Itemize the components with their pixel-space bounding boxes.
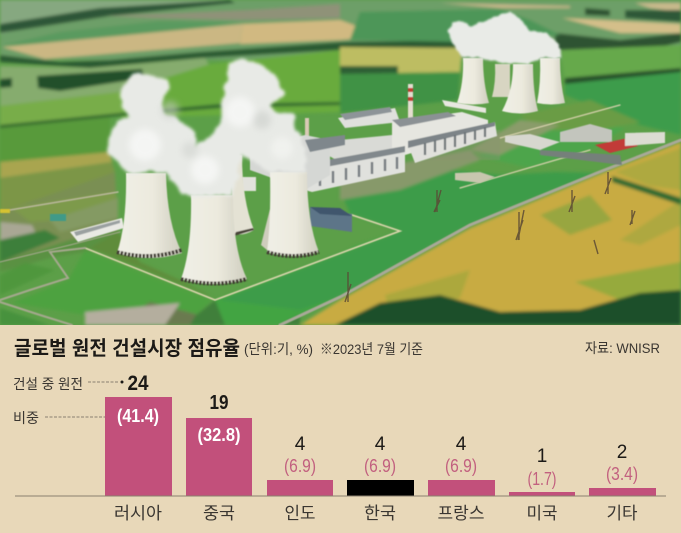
bar: United States: 미국 <box>526 504 558 523</box>
bar: India: 4 <box>295 434 306 455</box>
bar: Others: (3.4) <box>606 464 638 484</box>
chart panel <box>0 325 681 533</box>
bar: South Korea: 4 <box>375 434 386 455</box>
bar: France: 프랑스 <box>438 504 484 523</box>
legend: share <box>13 410 116 426</box>
smoke shading <box>129 97 293 184</box>
legend: units under construction: 건설 중 원전 <box>13 376 83 392</box>
power plant buildings <box>0 84 665 242</box>
farmland background <box>0 0 681 325</box>
bar: South Korea: (6.9) <box>364 456 396 476</box>
bar: China <box>186 392 252 523</box>
legend: share: 비중 <box>13 410 39 426</box>
pylons <box>345 172 635 302</box>
roads <box>0 105 681 325</box>
lower-left fields <box>0 172 118 262</box>
bar: Russia <box>105 372 172 523</box>
bar: China: (32.8) <box>198 425 240 445</box>
title: 글로벌 원전 건설시장 점유율 <box>14 337 240 360</box>
cooling towers: far group <box>457 58 565 114</box>
unit note: (단위:기, %) <box>244 341 313 357</box>
bar: India <box>267 434 333 523</box>
bar: United States: (1.7) <box>528 469 556 489</box>
bar: China: 19 <box>210 392 228 414</box>
bar: France: 4 <box>456 434 467 455</box>
bar: Others: 기타 <box>606 504 638 523</box>
bar: South Korea: 한국 <box>364 504 396 523</box>
bar chart <box>105 372 656 523</box>
bar: India: 인도 <box>284 504 316 523</box>
far tower smoke <box>448 12 562 64</box>
bar: Others: 2 <box>617 442 627 463</box>
near tower smoke <box>108 60 307 197</box>
bar: France <box>428 434 495 523</box>
bar: United States <box>509 446 575 523</box>
source: 자료: WNISR <box>585 340 660 356</box>
bar: Russia: 24 <box>128 372 149 395</box>
bar: Russia: 러시아 <box>114 504 162 523</box>
cooling towers: near group <box>117 155 319 284</box>
bar: India: (6.9) <box>284 456 316 476</box>
bar: Russia: (41.4) <box>117 406 159 426</box>
legend: units under construction <box>13 376 124 392</box>
bar: South Korea <box>347 434 414 523</box>
bar: Others <box>589 442 656 523</box>
bar: France: (6.9) <box>445 456 477 476</box>
date note: ※2023년 7월 기준 <box>320 341 423 357</box>
bar: China: 중국 <box>203 504 235 523</box>
bar: United States: 1 <box>537 446 547 467</box>
photo: nuclear power plant aerial view <box>0 0 681 325</box>
ochre field with forest <box>300 142 681 325</box>
